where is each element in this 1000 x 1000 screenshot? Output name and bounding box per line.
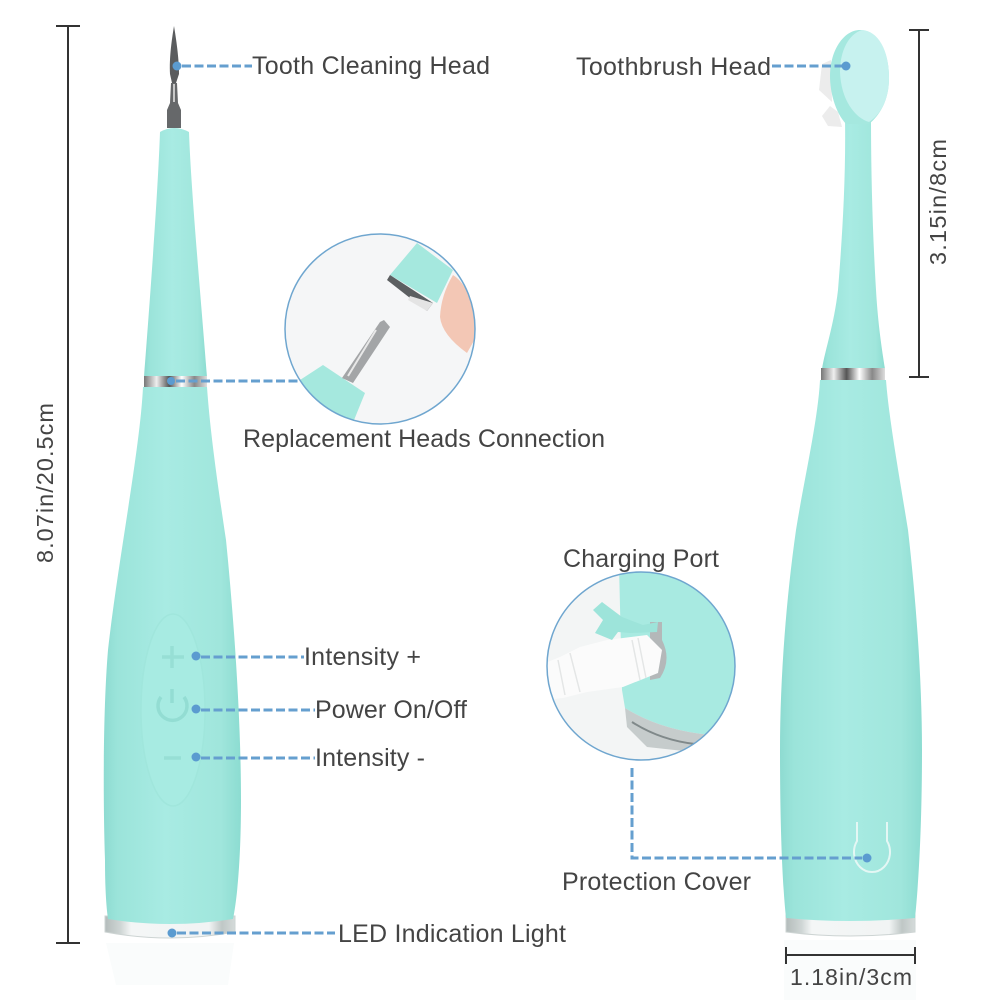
label: intensity plus: Intensity + <box>304 643 421 671</box>
icon: plus <box>162 646 184 668</box>
metal collar <box>144 376 207 387</box>
white cable plug <box>620 635 662 688</box>
protection flap <box>593 602 658 640</box>
upper metal ring <box>387 275 433 311</box>
label: power on/off <box>192 696 467 724</box>
metal collar <box>821 368 885 380</box>
glass base <box>786 915 915 936</box>
scaler tip <box>170 26 179 83</box>
protection cover outline <box>854 822 890 872</box>
label: charging port: Charging Port <box>563 545 719 573</box>
label: replacement heads connection: Replacement Heads Connection <box>243 425 605 453</box>
bristles <box>819 60 842 127</box>
measurement: brush head height: 3.15in/8cm <box>925 139 951 265</box>
brush head <box>830 30 889 124</box>
glass base <box>105 916 235 938</box>
handle upper neck <box>144 128 207 377</box>
finger <box>440 275 474 353</box>
port <box>650 622 667 680</box>
upper handle piece <box>390 243 453 303</box>
glass base reflection <box>784 940 916 1000</box>
measurement: width: 1.18in/3cm <box>790 964 912 990</box>
connector: charging port to protection cover <box>632 768 872 862</box>
right device: toothbrush <box>780 30 922 1000</box>
handle body <box>104 387 241 924</box>
icon: minus <box>164 756 181 760</box>
left device: tooth cleaning scaler <box>104 26 241 985</box>
measurement: total height: 8.07in/20.5cm <box>32 403 58 563</box>
label: intensity minus <box>192 744 425 772</box>
lower handle piece <box>300 365 365 420</box>
glass base reflection <box>106 943 234 985</box>
label: intensity plus <box>192 643 421 671</box>
handle body <box>780 380 922 921</box>
connector pin <box>342 320 390 383</box>
brush neck <box>822 118 885 369</box>
label: intensity minus: Intensity - <box>315 744 425 772</box>
label: LED indication light: LED Indication Light <box>338 920 566 948</box>
inset: charging port <box>540 565 745 760</box>
icon: power <box>158 689 187 720</box>
measurement: brush head height <box>909 30 951 377</box>
control panel recess <box>141 614 205 806</box>
glass base <box>625 708 710 752</box>
handle surface <box>619 572 734 734</box>
label: power on/off: Power On/Off <box>315 696 467 724</box>
measurement: total height <box>32 26 80 943</box>
connector: collar to inset <box>167 377 301 385</box>
inset: replacement heads connection <box>285 234 480 430</box>
measurement: width <box>786 947 915 990</box>
label: protection cover: Protection Cover <box>562 868 751 896</box>
label: LED indication light <box>168 920 566 948</box>
label: toothbrush head: Toothbrush Head <box>576 53 771 81</box>
label: tooth cleaning head: Tooth Cleaning Head <box>252 52 490 80</box>
